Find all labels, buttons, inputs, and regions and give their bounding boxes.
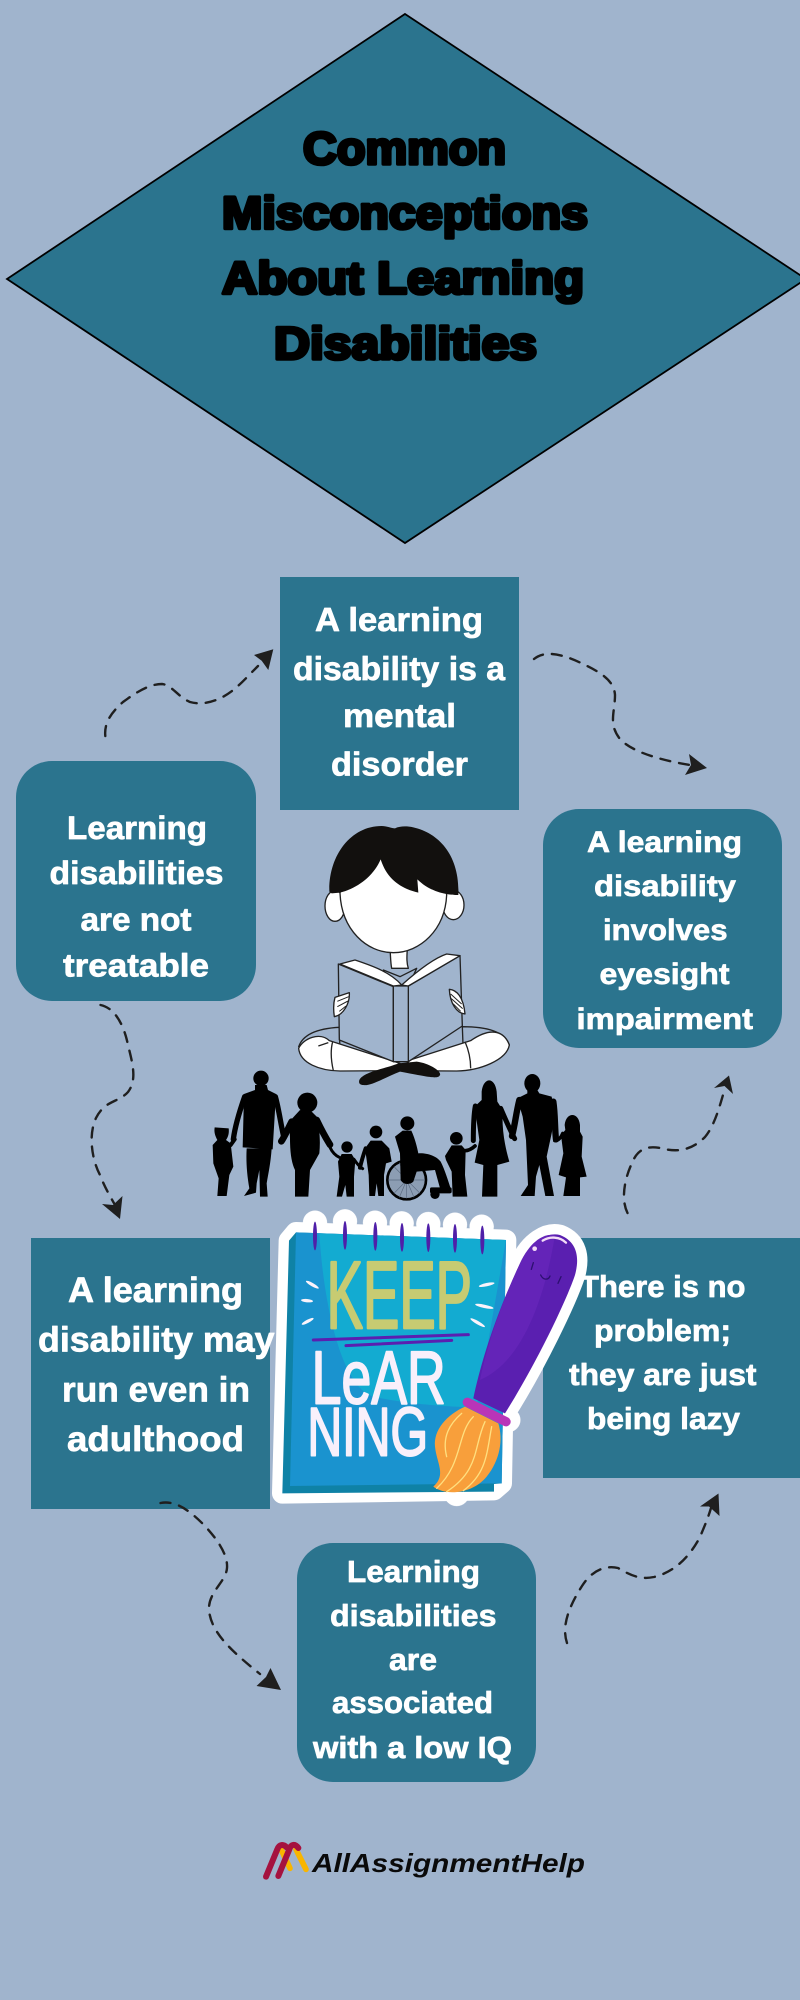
text: just being lazy: problem; — [594, 1313, 731, 1348]
logo text: AllAssignmentHelp — [311, 1848, 585, 1878]
silhouette: girl — [555, 1115, 587, 1196]
panel: eyesight impairment — [543, 809, 782, 1048]
panel: low IQ — [297, 1543, 536, 1782]
silhouette: man — [233, 1071, 283, 1197]
text: mental disorder: disorder — [331, 746, 468, 782]
arrow: mental disorder to eyesight — [534, 654, 707, 775]
text: eyesight impairment: impairment — [576, 1003, 753, 1036]
brush: handle — [473, 1234, 577, 1413]
title: Common — [303, 123, 506, 174]
text: low IQ: are — [389, 1642, 437, 1677]
silhouette: child — [213, 1127, 235, 1196]
text: eyesight impairment: eyesight — [600, 958, 730, 991]
lettering: keep: KEEP — [327, 1243, 472, 1349]
title: Disabilities — [274, 318, 537, 369]
sticker: white border — [282, 1209, 577, 1506]
panel: not treatable — [16, 761, 256, 1001]
silhouette: wheelchair user — [387, 1116, 452, 1199]
text: runs into adulthood: disability may — [38, 1320, 275, 1360]
text: not treatable: treatable — [63, 948, 209, 984]
silhouette: boy — [360, 1126, 392, 1196]
lettering: learning: LeAR — [312, 1335, 446, 1419]
lettering: learning: NING — [307, 1394, 428, 1470]
brush: bristles — [433, 1407, 501, 1492]
boy: feet — [359, 1062, 440, 1085]
text: mental disorder — [293, 601, 506, 782]
text: low IQ: Learning — [347, 1554, 480, 1589]
silhouette: woman in dress — [473, 1080, 515, 1197]
lettering: learning — [307, 1335, 446, 1470]
text: just being lazy: they are just — [569, 1357, 756, 1392]
text: low IQ: associated — [332, 1685, 493, 1720]
text: low IQ: with a low IQ — [312, 1730, 512, 1765]
title diamond — [7, 14, 800, 543]
silhouette: small child — [330, 1141, 363, 1197]
text: just being lazy — [569, 1269, 756, 1436]
arrow: adulthood to low IQ — [160, 1503, 281, 1690]
boy: legs — [299, 1027, 509, 1071]
brush: ferrule — [467, 1402, 506, 1422]
boy: ears and head — [325, 847, 464, 968]
panel: just being lazy — [543, 1238, 800, 1478]
silhouette: child holding hands — [445, 1132, 475, 1197]
text: low IQ: disabilities — [330, 1598, 496, 1633]
text: low IQ — [312, 1554, 512, 1765]
text: mental disorder: A learning — [315, 601, 483, 638]
title — [222, 123, 588, 369]
illustration: boy reading a book — [299, 826, 509, 1085]
text: mental disorder: disability is a — [293, 650, 506, 687]
text: not treatable: Learning — [67, 810, 207, 846]
title: Misconceptions — [222, 188, 588, 238]
illustration: keep learning notebook sticker — [282, 1209, 577, 1506]
arrow: treatable to mental disorder — [105, 649, 273, 736]
silhouette: woman — [281, 1093, 330, 1197]
title: About Learning — [222, 252, 584, 304]
arrow: low IQ to lazy — [565, 1494, 720, 1643]
text: runs into adulthood: adulthood — [67, 1420, 244, 1459]
logo mark — [266, 1845, 306, 1877]
text: just being lazy: being lazy — [587, 1401, 741, 1436]
panel: runs into adulthood — [31, 1238, 275, 1509]
lettering: underline strokes — [313, 1335, 468, 1346]
arrow: lazy to eyesight — [624, 1076, 733, 1213]
illustration: family silhouettes — [213, 1071, 587, 1199]
notebook: pages — [282, 1232, 506, 1493]
boy: hands — [334, 989, 465, 1017]
text: eyesight impairment: involves — [603, 914, 728, 947]
text: mental disorder: mental — [343, 697, 456, 734]
text: just being lazy: There is no — [580, 1269, 746, 1304]
text: runs into adulthood — [38, 1271, 275, 1459]
notebook: spiral rings — [313, 1221, 484, 1254]
panel: mental disorder — [280, 577, 519, 810]
text: eyesight impairment — [576, 826, 753, 1036]
arrow: treatable to adulthood — [92, 1005, 133, 1219]
text: runs into adulthood: run even in — [62, 1370, 250, 1410]
text: not treatable — [50, 810, 224, 984]
silhouette: man holding hands — [512, 1074, 556, 1196]
lettering: sparkle marks — [301, 1280, 495, 1328]
text: not treatable: disabilities — [50, 855, 224, 891]
logo: AllAssignmentHelp — [266, 1845, 585, 1878]
text: runs into adulthood: A learning — [68, 1271, 243, 1310]
boy: hair — [329, 826, 458, 895]
text: eyesight impairment: disability — [594, 870, 736, 903]
text: eyesight impairment: A learning — [587, 826, 742, 859]
text: not treatable: are not — [80, 902, 192, 938]
boy: open book — [338, 954, 462, 1062]
